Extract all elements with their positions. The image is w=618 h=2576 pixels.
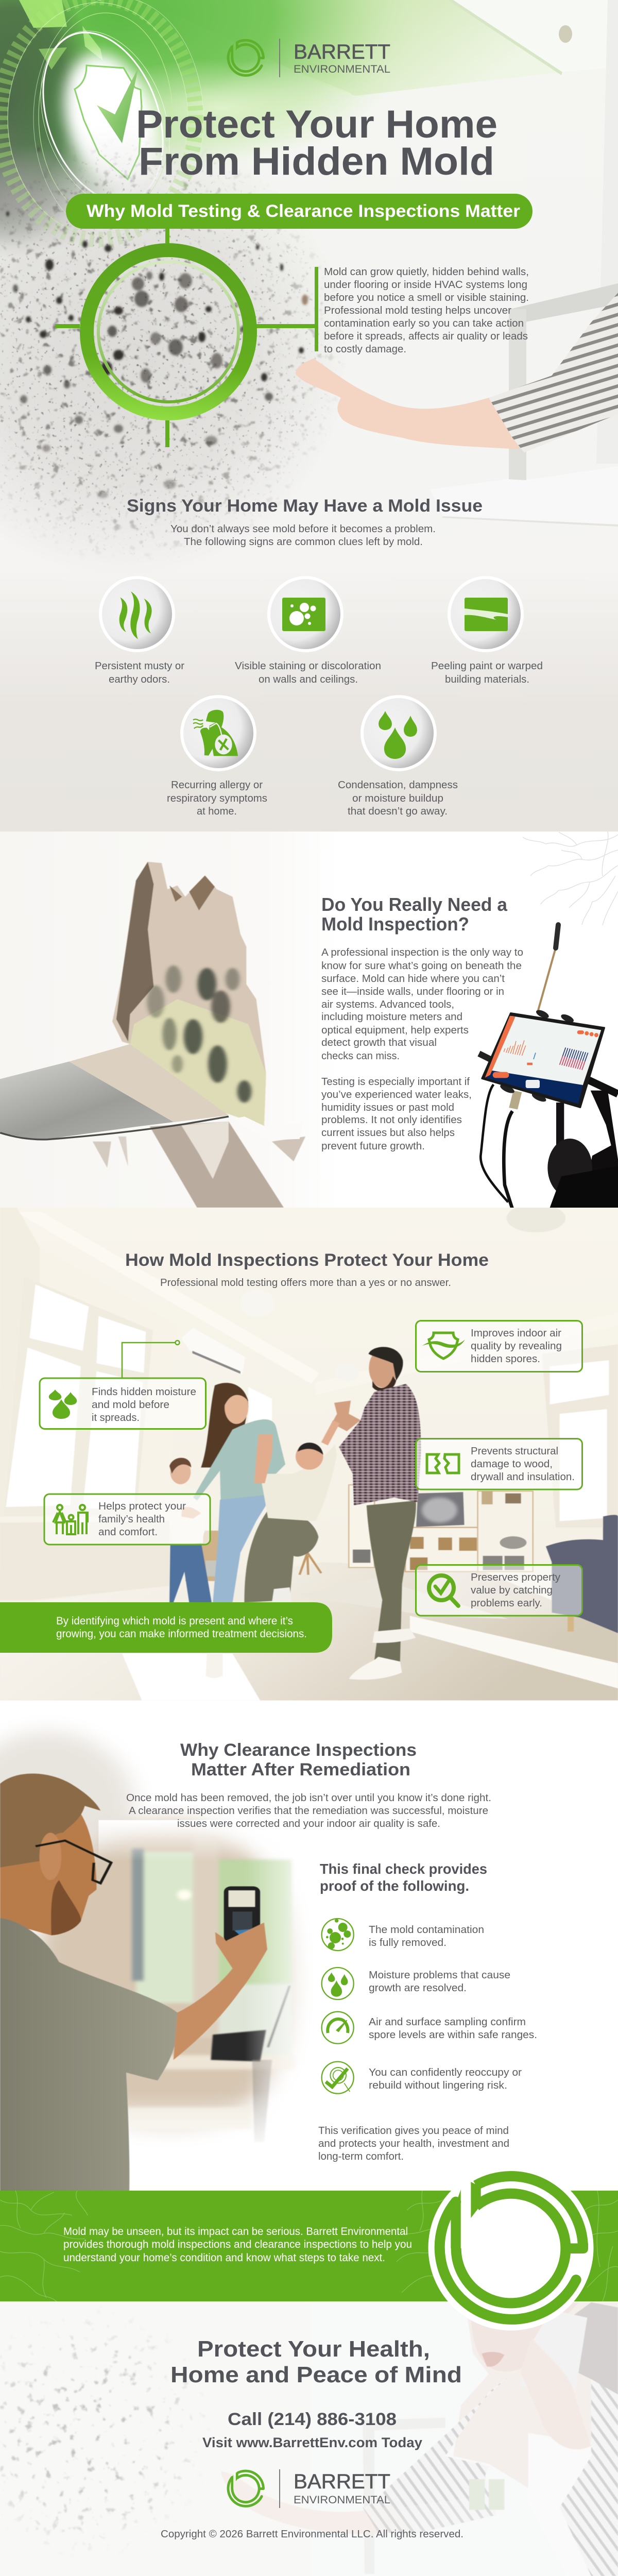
inspector figure <box>0 1774 267 2195</box>
signs intro text: You don’t always see mold before it becomes a problem. <box>170 523 436 535</box>
green banner: By identifying which mold is present and where it’s <box>56 1615 293 1627</box>
callout: preserves property value <box>416 1565 582 1616</box>
heading: do you really need: Do You Really Need a <box>321 894 508 915</box>
proof item: reoccupy confidently <box>322 2062 522 2094</box>
callout: indoor air quality <box>416 1321 582 1371</box>
proof item: contamination removed: is fully removed. <box>369 1937 447 1948</box>
proof item: moisture resolved: Moisture problems that cause <box>369 1970 510 1981</box>
intro text block <box>315 266 529 355</box>
logo: Barrett Environmental: BARRETT <box>294 41 390 63</box>
section background <box>0 832 618 1208</box>
sign: peeling paint: building materials. <box>445 674 529 685</box>
subtitle pill <box>66 194 533 229</box>
sign: allergy symptoms: at home. <box>197 806 237 817</box>
hero background wall <box>0 0 618 832</box>
proof item: sampling confirms: spore levels are within safe ranges. <box>369 2029 537 2041</box>
heading: clearance inspections: Why Clearance Inspections <box>180 1740 417 1760</box>
title <box>136 103 497 183</box>
faucet and counter background <box>430 283 618 527</box>
signs intro text <box>170 523 436 548</box>
faint mold specks <box>0 2303 258 2561</box>
intro text block: contamination early so you can take action <box>324 318 524 329</box>
sign: peeling paint <box>431 578 543 685</box>
proof item: reoccupy confidently: rebuild without lingering risk. <box>369 2080 507 2091</box>
sign: condensation: or moisture buildup <box>352 793 443 804</box>
clearance intro text <box>126 1792 491 1829</box>
callout: indoor air quality: hidden spores. <box>471 1353 540 1365</box>
icon: cracked wall <box>427 1454 459 1473</box>
callout: protects family: family’s health <box>98 1514 165 1525</box>
intro text block: to costly damage. <box>324 344 406 355</box>
boy <box>244 1420 340 1603</box>
mold texture on wall <box>0 142 341 556</box>
callout: finds hidden moisture: Finds hidden moisture <box>92 1386 196 1398</box>
intro text block: before it spreads, affects air quality or leads <box>324 331 528 342</box>
sign: allergy symptoms: respiratory symptoms <box>167 793 267 804</box>
clearance intro text: Once mold has been removed, the job isn’t over until you know it’s done right. <box>126 1792 491 1804</box>
panel: closing statement band <box>0 2191 618 2301</box>
icon: magnifier with check in circle <box>322 2062 354 2094</box>
callout: protects family: Helps protect your <box>98 1501 186 1512</box>
signs intro text: The following signs are common clues left by mold. <box>184 536 423 548</box>
closing text: This verification gives you peace of mind <box>318 2125 509 2137</box>
icon: family <box>53 1505 88 1534</box>
girl <box>167 1458 212 1603</box>
sign: allergy symptoms: Recurring allergy or <box>171 779 263 791</box>
footer logo: ENVIRONMENTAL <box>294 2494 390 2506</box>
closing heading: Protect Your Health, <box>197 2336 430 2362</box>
background cabinet and glow <box>0 0 572 250</box>
sign: allergy symptoms <box>167 697 267 817</box>
photo: family playing in bright living room <box>0 1204 618 1700</box>
sign: musty odors: Persistent musty or <box>95 660 184 672</box>
clearance intro text: A clearance inspection verifies that the remediation was successful, moisture <box>129 1805 488 1817</box>
photo: hand reaching toward wall with striped sleeve <box>296 293 618 452</box>
icon: Barrett logo mark <box>228 40 265 75</box>
intro text block: before you notice a smell or visible staining. <box>324 292 529 303</box>
inspection text: see it—inside walls, under flooring or in <box>321 986 504 997</box>
callout: prevents structural damage <box>416 1438 582 1489</box>
magnifier target ring <box>55 229 315 447</box>
callout: finds hidden moisture <box>40 1378 206 1429</box>
mold spots <box>6 147 308 498</box>
green banner: growing, you can make informed treatment decisions. <box>56 1628 307 1640</box>
heading: how mold inspections protect: How Mold Inspections Protect Your Home <box>125 1250 489 1270</box>
inspection text: surface. Mold can hide where you can’t <box>321 973 505 985</box>
sign: condensation: Condensation, dampness <box>338 779 458 791</box>
decorative fungal branches <box>0 2191 618 2301</box>
inspection text: optical equipment, help experts <box>321 1025 469 1036</box>
statement text <box>63 2226 412 2264</box>
icon: moisture drops <box>49 1389 77 1419</box>
proof item: contamination removed: The mold contamination <box>369 1924 484 1936</box>
inspection text: prevent future growth. <box>321 1141 425 1152</box>
photo: scraped wall with mold <box>0 832 340 1208</box>
proof item: sampling confirms <box>322 2012 537 2044</box>
panel: how inspections protect your home <box>0 1204 618 1700</box>
photo: inspector holding moisture meter <box>0 1732 363 2196</box>
wall shading behind mold <box>0 137 310 537</box>
icon: drops in circle <box>322 1968 354 1999</box>
inspection text: A professional inspection is the only way to <box>321 947 523 958</box>
proof item: sampling confirms: Air and surface sampling confirm <box>369 2016 526 2028</box>
title: Protect Your Home <box>136 103 497 146</box>
green banner <box>0 1602 332 1653</box>
website: Visit www.BarrettEnv.com Today <box>202 2435 422 2450</box>
panel: contact section background <box>0 2301 618 2576</box>
photo: inspection tablet on stand with probe <box>479 925 618 1209</box>
intro text block: Mold can grow quietly, hidden behind walls, <box>324 266 529 278</box>
icon: glowing shield with checkmark <box>40 31 170 194</box>
closing heading: Home and Peace of Mind <box>170 2362 462 2387</box>
callout: prevents structural damage: drywall and insulation. <box>471 1471 575 1483</box>
callout: preserves property value: Preserves property <box>471 1572 560 1583</box>
heading: clearance inspections: Matter After Remediation <box>191 1760 410 1780</box>
heading: clearance inspections <box>180 1740 417 1780</box>
statement text: provides thorough mold inspections and clearance inspections to help you <box>63 2239 412 2250</box>
connector: callout to air conditioner <box>122 1341 179 1378</box>
heading: do you really need <box>321 894 508 935</box>
icon: gauge <box>322 2012 354 2044</box>
logo: Barrett Environmental <box>228 39 390 77</box>
decorative fungal branches <box>523 832 618 925</box>
clearance intro text: issues were corrected and your indoor air quality is safe. <box>177 1818 440 1829</box>
heading: final check <box>320 1861 487 1894</box>
closing heading <box>170 2336 462 2387</box>
icon: Barrett logo mark <box>228 2471 265 2506</box>
callout: prevents structural damage: damage to wood, <box>471 1459 553 1470</box>
sign: visible staining <box>235 578 381 685</box>
logo: Barrett Environmental: ENVIRONMENTAL <box>294 63 390 75</box>
callout: indoor air quality: Improves indoor air <box>471 1328 561 1339</box>
heading: signs: Signs Your Home May Have a Mold Issue <box>127 496 483 516</box>
inspection text: problems. It not only identifies <box>321 1114 462 1126</box>
inspection text: humidity issues or past mold <box>321 1102 454 1113</box>
proof item: reoccupy confidently: You can confidently reoccupy or <box>369 2067 522 2078</box>
section background <box>0 1707 618 2191</box>
sign: musty odors: earthy odors. <box>109 674 170 685</box>
closing text <box>318 2125 509 2162</box>
inspection text: including moisture meters and <box>321 1011 462 1023</box>
decorative HUD rings <box>0 0 203 240</box>
callout: protects family <box>44 1494 210 1545</box>
intro text block: under flooring or inside HVAC systems long <box>324 279 527 291</box>
inspection text: you’ve experienced water leaks, <box>321 1089 472 1100</box>
closing text: and protects your health, investment and <box>318 2138 509 2149</box>
sign: visible staining: Visible staining or discoloration <box>235 660 381 672</box>
sign: condensation: that doesn’t go away. <box>348 806 448 817</box>
callout: prevents structural damage: Prevents structural <box>471 1446 558 1457</box>
callout: preserves property value: value by catching <box>471 1585 553 1596</box>
callout: finds hidden moisture: and mold before <box>92 1399 169 1411</box>
sign: visible staining: on walls and ceilings. <box>259 674 358 685</box>
intro text block: Professional mold testing helps uncover <box>324 305 511 316</box>
inspection text: air systems. Advanced tools, <box>321 999 454 1010</box>
woman <box>181 1383 285 1678</box>
callout: preserves property value: problems early. <box>471 1598 542 1609</box>
subtitle pill: Why Mold Testing & Clearance Inspections Matter <box>87 201 520 221</box>
statement text: understand your home’s condition and know what steps to take next. <box>63 2252 385 2264</box>
footer logo: BARRETT <box>294 2470 390 2493</box>
proof item: moisture resolved: growth are resolved. <box>369 1982 467 1994</box>
sign: musty odors <box>95 578 184 685</box>
photo: faded woman on phone <box>221 2302 618 2576</box>
copyright: Copyright © 2026 Barrett Environmental LLC. All rights reserved. <box>161 2529 464 2540</box>
icon: peeling paint <box>449 578 522 651</box>
statement text: Mold may be unseen, but its impact can be serious. Barrett Environmental <box>63 2226 408 2238</box>
icon: mold spores <box>322 1919 354 1951</box>
inspection text: checks can miss. <box>321 1050 400 1062</box>
panel: why clearance inspections matter <box>0 1707 618 2196</box>
title: From Hidden Mold <box>139 140 494 183</box>
man <box>332 1347 421 1680</box>
heading: final check: This final check provides <box>320 1861 487 1877</box>
heading: final check: proof of the following. <box>320 1878 469 1894</box>
callout: protects family: and comfort. <box>98 1527 158 1538</box>
inspection text <box>321 947 523 1152</box>
proof item: moisture resolved <box>322 1968 510 1999</box>
inspection text: Testing is especially important if <box>321 1076 470 1088</box>
inspection text: know for sure what’s going on beneath the <box>321 960 522 972</box>
section intro text: Professional mold testing offers more than a yes or no answer. <box>160 1277 451 1289</box>
icon: odor waves <box>100 578 174 651</box>
proof item: contamination removed <box>322 1919 484 1951</box>
sign: condensation <box>338 697 458 817</box>
icon: magnifier with check <box>429 1575 458 1606</box>
heading: do you really need: Mold Inspection? <box>321 913 469 935</box>
inspection text: detect growth that visual <box>321 1037 437 1048</box>
callout: finds hidden moisture: it spreads. <box>92 1412 140 1423</box>
icon: stained wall <box>269 578 342 651</box>
panel: hero and warning signs <box>0 0 618 832</box>
callout: indoor air quality: quality by revealing <box>471 1341 562 1352</box>
footer logo <box>228 2469 390 2508</box>
icon: water drops <box>362 697 435 770</box>
phone number: Call (214) 886-3108 <box>228 2410 397 2429</box>
icon: coughing person <box>182 697 255 770</box>
inspection text: current issues but also helps <box>321 1127 455 1139</box>
closing text: long-term comfort. <box>318 2151 404 2162</box>
sign: peeling paint: Peeling paint or warped <box>431 660 543 672</box>
large Barrett logo badge <box>428 2165 593 2331</box>
icon: shield with air wave <box>422 1333 465 1359</box>
panel: do you need an inspection <box>0 832 618 1209</box>
